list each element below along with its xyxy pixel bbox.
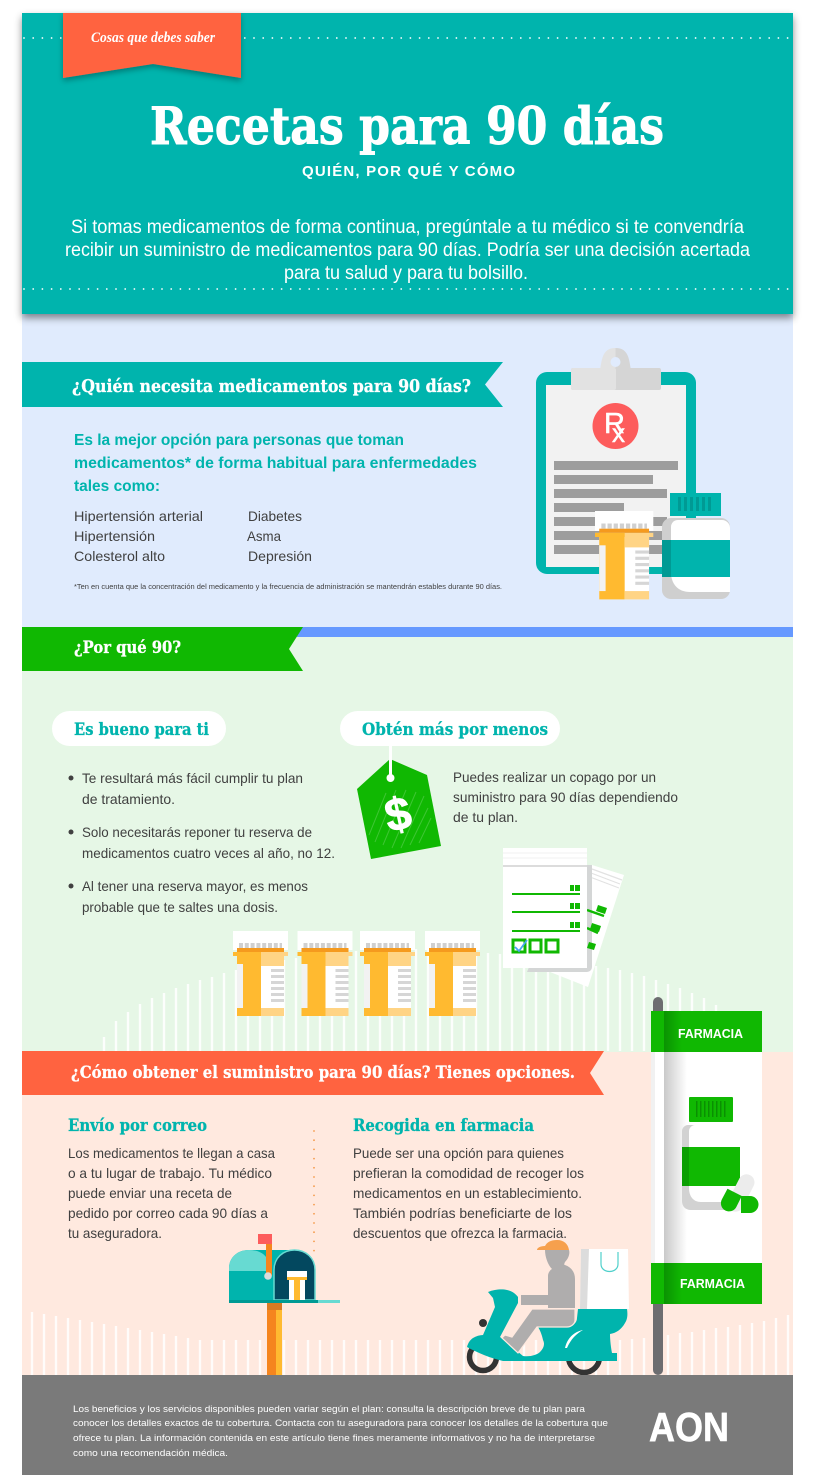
text: copay: suministro para 90 días dependiendo — [453, 789, 678, 805]
panel: header — [22, 13, 793, 314]
section background: how — [22, 1052, 793, 1375]
heading: why 90: ¿Por qué 90? — [74, 638, 181, 658]
option: mail delivery: puede enviar una receta de — [68, 1185, 232, 1201]
section background: who — [22, 314, 793, 627]
subtitle: QUIÉN, POR QUÉ Y CÓMO — [302, 162, 515, 180]
intro text: Si tomas medicamentos de forma continua, pregúntale a tu médico si te convendría — [71, 217, 744, 238]
heading: how to get: ¿Cómo obtener el suministro para 90 días? Tienes opciones. — [71, 1063, 575, 1083]
label: farmacia bottom: FARMACIA — [680, 1276, 746, 1291]
text: copay — [453, 769, 678, 825]
option: pharmacy pickup: descuentos que ofrezca la farmacia. — [353, 1225, 567, 1241]
intro text: para tu salud y para tu bolsillo. — [284, 263, 528, 284]
option: mail delivery: o a tu lugar de trabajo. Tu médico — [68, 1165, 272, 1181]
intro text — [65, 217, 750, 284]
list of conditions: Hipertensión arterial — [74, 508, 203, 524]
text: best option: medicamentos* de forma habitual para enfermedades — [74, 455, 477, 472]
bullet list: medicamentos cuatro veces al año, no 12. — [82, 845, 335, 861]
bullet list — [68, 770, 335, 915]
text: best option: Es la mejor opción para personas que toman — [74, 432, 404, 449]
text: copay: Puedes realizar un copago por un — [453, 769, 656, 785]
option: pharmacy pickup: También podrías beneficiarte de los — [353, 1205, 572, 1221]
panel: footer — [22, 1375, 793, 1475]
option: pharmacy pickup: prefieran la comodidad de recoger los — [353, 1165, 584, 1181]
option: pharmacy pickup — [353, 1116, 584, 1241]
pill: get more for less: Obtén más por menos — [362, 720, 548, 740]
text: copay: de tu plan. — [453, 809, 518, 825]
heading: how to get — [22, 1051, 604, 1095]
decorative fence peach — [32, 1312, 788, 1375]
label: farmacia top: FARMACIA — [678, 1026, 744, 1041]
text: best option: tales como: — [74, 478, 160, 495]
icon: four amber bottles — [233, 931, 480, 1016]
icon: mailbox — [229, 1234, 340, 1375]
option: mail delivery: Envío por correo — [68, 1116, 207, 1135]
ribbon: Cosas que debes saber — [91, 30, 215, 46]
pill: get more for less — [340, 711, 560, 746]
footnote: *Ten en cuenta que la concentración del medicamento y la frecuencia de administración se mantendrán estables durante 90 días. — [74, 582, 502, 591]
bullet list: de tratamiento. — [82, 791, 175, 807]
logo: AON: AON — [649, 1404, 729, 1450]
bullet list: Solo necesitarás reponer tu reserva de — [82, 824, 312, 840]
bullet list: Al tener una reserva mayor, es menos — [82, 878, 308, 894]
pill: good for you — [52, 711, 226, 746]
heading: who needs — [22, 362, 503, 407]
ribbon — [63, 13, 241, 78]
option: mail delivery — [68, 1116, 275, 1241]
list of conditions: Depresión — [248, 548, 312, 564]
list of conditions: Hipertensión — [74, 528, 155, 544]
title: Recetas para 90 días — [150, 97, 664, 157]
icon: pharmacy sign — [651, 997, 762, 1375]
icon: scooter — [467, 1240, 629, 1372]
text: best option — [74, 432, 477, 495]
option: mail delivery: pedido por correo cada 90 días a — [68, 1205, 268, 1221]
list of conditions: Diabetes — [248, 508, 302, 524]
intro text: recibir un suministro de medicamentos para 90 días. Podría ser una decisión acertada — [65, 240, 750, 261]
option: pharmacy pickup: Recogida en farmacia — [353, 1116, 534, 1135]
option: pharmacy pickup: Puede ser una opción para quienes — [353, 1145, 564, 1161]
icon: clipboard and bottles: R — [604, 408, 625, 440]
list of conditions: Asma — [247, 528, 281, 544]
option: mail delivery: Los medicamentos te llegan a casa — [68, 1145, 275, 1161]
list of conditions: Colesterol alto — [74, 548, 165, 564]
shopping bag — [580, 1249, 629, 1309]
heading: why 90 — [22, 627, 303, 671]
icon: forms — [503, 848, 624, 987]
icon: clipboard and bottles: x — [612, 418, 625, 448]
option: pharmacy pickup: medicamentos en un establecimiento. — [353, 1185, 582, 1201]
icon: price tag: $ — [380, 786, 416, 842]
rider — [502, 1240, 575, 1353]
blue divider bar — [297, 627, 793, 637]
list of conditions — [74, 508, 312, 564]
heading: who needs: ¿Quién necesita medicamentos para 90 días? — [72, 376, 471, 397]
disclaimer: Los beneficios y los servicios disponibles pueden variar según el plan: consulta la descripción breve de tu plan para — [73, 1404, 586, 1415]
amber bottle — [595, 511, 653, 599]
white bottle — [662, 493, 730, 599]
disclaimer: como una recomendación médica. — [73, 1448, 228, 1459]
option: mail delivery: tu aseguradora. — [68, 1225, 162, 1241]
disclaimer — [73, 1404, 608, 1459]
section background: why — [22, 627, 793, 1052]
disclaimer: ofrece tu plan. La información contenida en este artículo tiene fines meramente informativos y no ha de interpretarse — [73, 1433, 595, 1444]
icon: clipboard and bottles — [536, 348, 730, 599]
decorative fence green — [104, 949, 716, 1051]
bullet list: probable que te saltes una dosis. — [82, 899, 278, 915]
disclaimer: conocer los detalles exactos de tu cobertura. Contacta con tu aseguradora para conocer los detalles de la cobertura que — [73, 1418, 608, 1429]
green bottle and pills — [682, 1097, 759, 1214]
pill: good for you: Es bueno para ti — [74, 720, 209, 740]
icon: price tag — [357, 746, 441, 859]
bullet list: Te resultará más fácil cumplir tu plan — [82, 770, 303, 786]
